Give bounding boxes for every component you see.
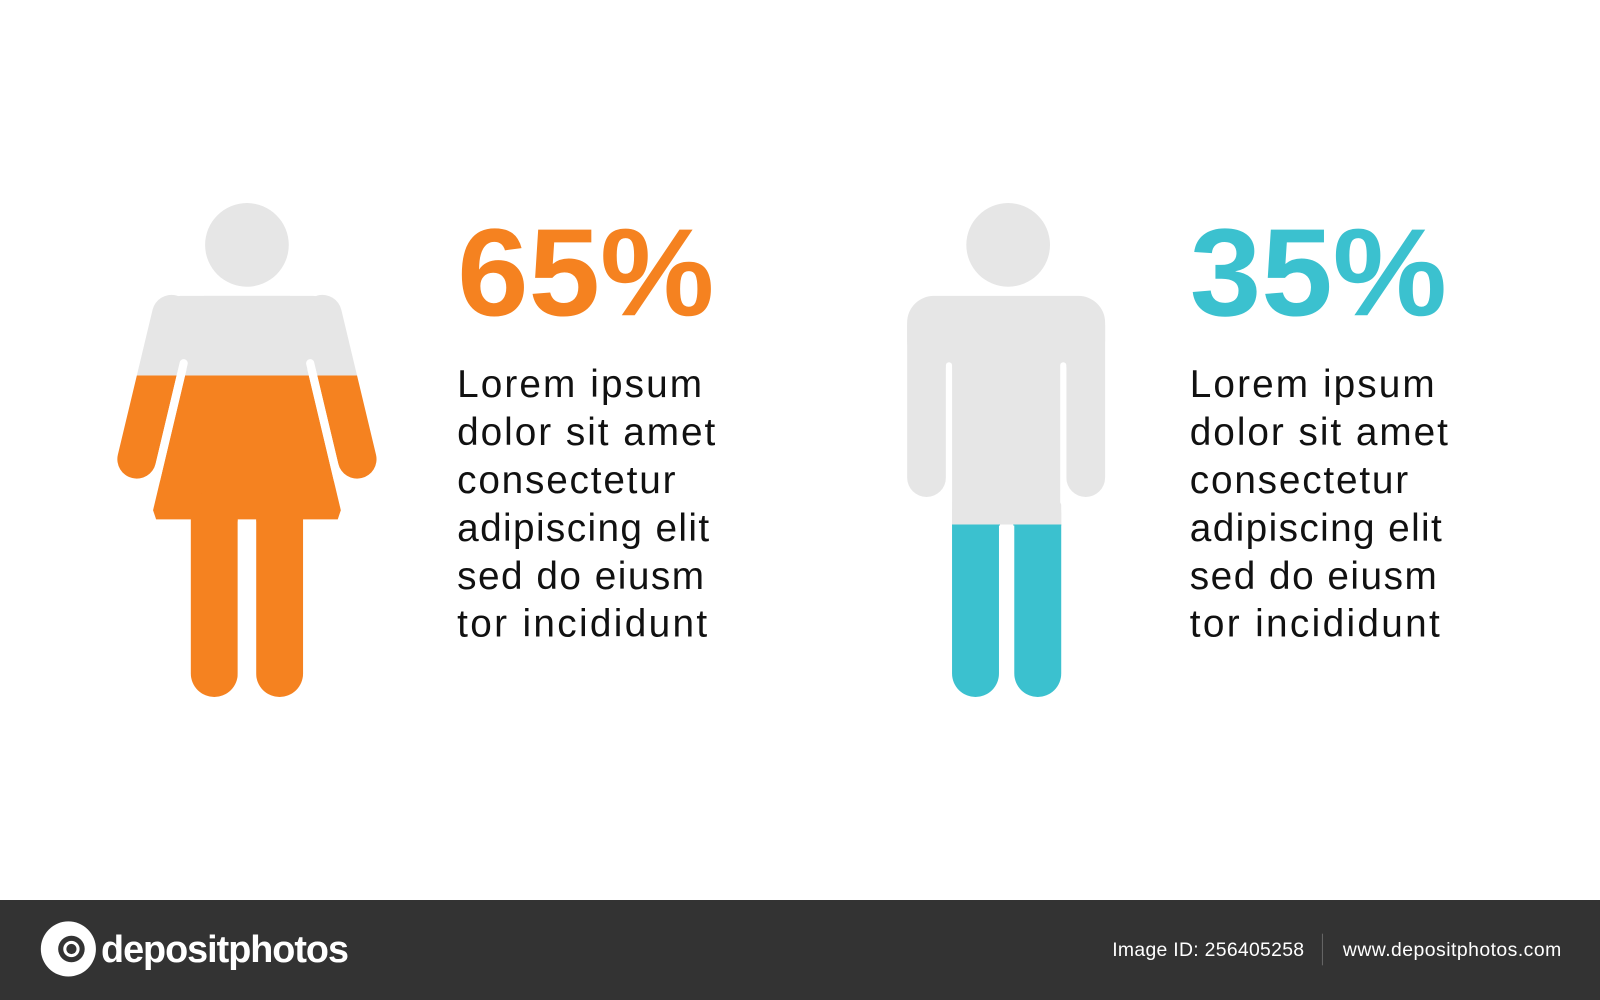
text block right: sed do eiusm	[1190, 555, 1437, 598]
stat: 35%: 35%	[1190, 203, 1447, 342]
text block right: adipiscing elit	[1190, 507, 1442, 550]
text block right	[1190, 363, 1461, 646]
text block left: adipiscing elit	[457, 507, 709, 550]
icon: camera logo	[41, 921, 96, 977]
text block left: tor incididunt	[457, 603, 707, 646]
website: www.depositphotos.com	[1342, 939, 1561, 961]
image id: Image ID: 256405258	[1112, 939, 1304, 961]
text block left: sed do eiusm	[457, 555, 704, 598]
icon: man figure 35%	[907, 203, 1105, 703]
icon: woman figure 65%	[137, 203, 357, 700]
text block right: tor incididunt	[1190, 603, 1440, 646]
text block left: dolor sit amet	[457, 411, 716, 454]
text block right: Lorem ipsum	[1190, 363, 1435, 406]
text block left	[457, 363, 728, 646]
stat: 65%: 65%	[457, 203, 714, 342]
text block left: consectetur	[457, 459, 676, 502]
text block left: Lorem ipsum	[457, 363, 702, 406]
footer bar	[0, 900, 1600, 1000]
text block right: dolor sit amet	[1190, 411, 1448, 454]
text block right: consectetur	[1190, 459, 1408, 502]
logo text: depositphotos	[101, 928, 349, 970]
